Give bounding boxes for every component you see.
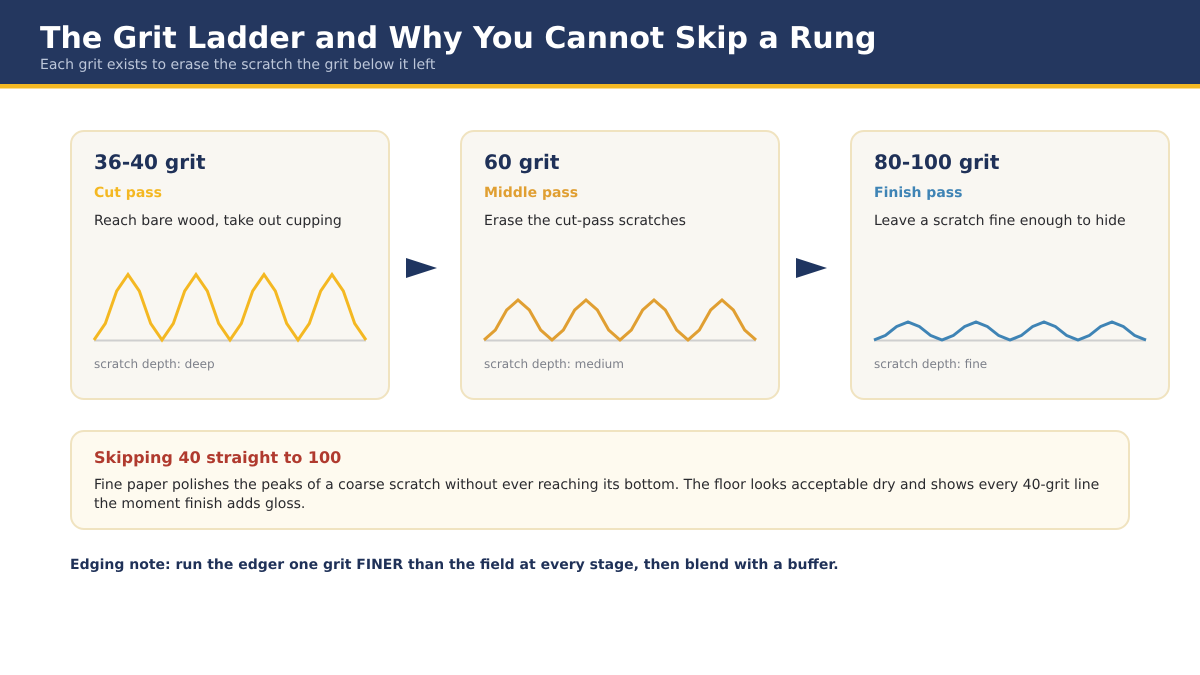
arrow: middle to finish [796,258,827,278]
depth caption: scratch depth: deep [94,357,215,371]
description: Leave a scratch fine enough to hide [874,213,1126,229]
pass label: Finish pass [874,185,962,201]
panel: 60 grit middle pass [461,131,779,399]
scratch profile chart: fine [874,322,1146,340]
depth caption: scratch depth: medium [484,357,624,371]
header banner [0,0,1200,88]
callout: skipping grits warning [71,431,1129,529]
edging note: Edging note: run the edger one grit FINER than the field at every stage, then blend with a buffer. [70,557,839,573]
arrow: cut to middle [406,258,437,278]
description: Reach bare wood, take out cupping [94,213,342,229]
card heading: 36-40 grit [94,150,206,174]
scratch profile chart: deep [94,274,366,340]
pass label: Middle pass [484,185,578,201]
subtitle: Each grit exists to erase the scratch the grit below it left [40,57,436,73]
callout body: Fine paper polishes the peaks of a coarse scratch without ever reaching its bottom. The floor looks acceptable dry and shows every 40-grit line [94,477,1099,493]
depth caption: scratch depth: fine [874,357,987,371]
callout body: the moment finish adds gloss. [94,496,305,512]
callout heading: Skipping 40 straight to 100 [94,448,341,467]
panel: 36-40 grit cut pass [71,131,389,399]
card heading: 80-100 grit [874,150,1000,174]
scratch profile chart: medium [484,300,756,340]
description: Erase the cut-pass scratches [484,213,686,229]
pass label: Cut pass [94,185,162,201]
title: The Grit Ladder and Why You Cannot Skip a Rung [40,21,876,56]
panel: 80-100 grit finish pass [851,131,1169,399]
card heading: 60 grit [484,150,560,174]
